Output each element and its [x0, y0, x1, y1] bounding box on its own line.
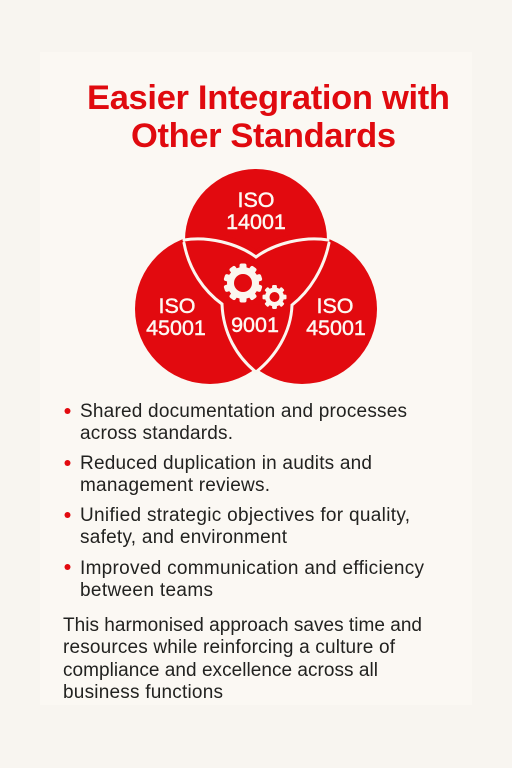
bullet 1: [64, 401, 407, 444]
closing paragraph: [63, 615, 422, 703]
bullet 3: safety, and environment: [80, 527, 288, 548]
label: ISO 45001 right: ISO: [316, 294, 354, 318]
venn overlap lines: [184, 239, 329, 372]
label: ISO 45001 left: ISO: [158, 294, 196, 318]
closing paragraph: resources while reinforcing a culture of: [63, 637, 396, 658]
closing paragraph: This harmonised approach saves time and: [63, 615, 422, 636]
label: ISO 45001 right: 45001: [306, 316, 366, 340]
title: [87, 79, 450, 155]
label: ISO 45001 left: [146, 294, 206, 340]
label: ISO 14001: ISO: [237, 188, 275, 212]
venn circles: [135, 169, 377, 384]
label: ISO 45001 left: 45001: [146, 316, 206, 340]
label: ISO 14001: [226, 188, 286, 234]
closing paragraph: compliance and excellence across all: [63, 660, 378, 681]
bullet 4: Improved communication and efficiency: [80, 558, 424, 579]
label: 9001: 9001: [231, 313, 279, 337]
bullet 4: [64, 558, 424, 601]
closing paragraph: business functions: [63, 682, 223, 703]
label: ISO 45001 right: [306, 294, 366, 340]
title: Easier Integration with: [87, 79, 450, 117]
icon: small gear: [262, 285, 286, 309]
bullet list: [64, 401, 424, 601]
venn diagram: [135, 169, 377, 384]
bullet 1: Shared documentation and processes: [80, 401, 407, 422]
bullet 2: Reduced duplication in audits and: [80, 453, 372, 474]
bullet 2: management reviews.: [80, 475, 270, 496]
title: Other Standards: [131, 117, 396, 155]
bullet 2: [64, 453, 372, 496]
icon: large gear: [223, 264, 263, 302]
panel: background card: [40, 52, 472, 705]
bullet 3: Unified strategic objectives for quality,: [80, 505, 410, 526]
bullet 3: [64, 505, 410, 548]
bullet 4: between teams: [80, 580, 213, 601]
label: ISO 14001: 14001: [226, 210, 286, 234]
bullet 1: across standards.: [80, 423, 233, 444]
